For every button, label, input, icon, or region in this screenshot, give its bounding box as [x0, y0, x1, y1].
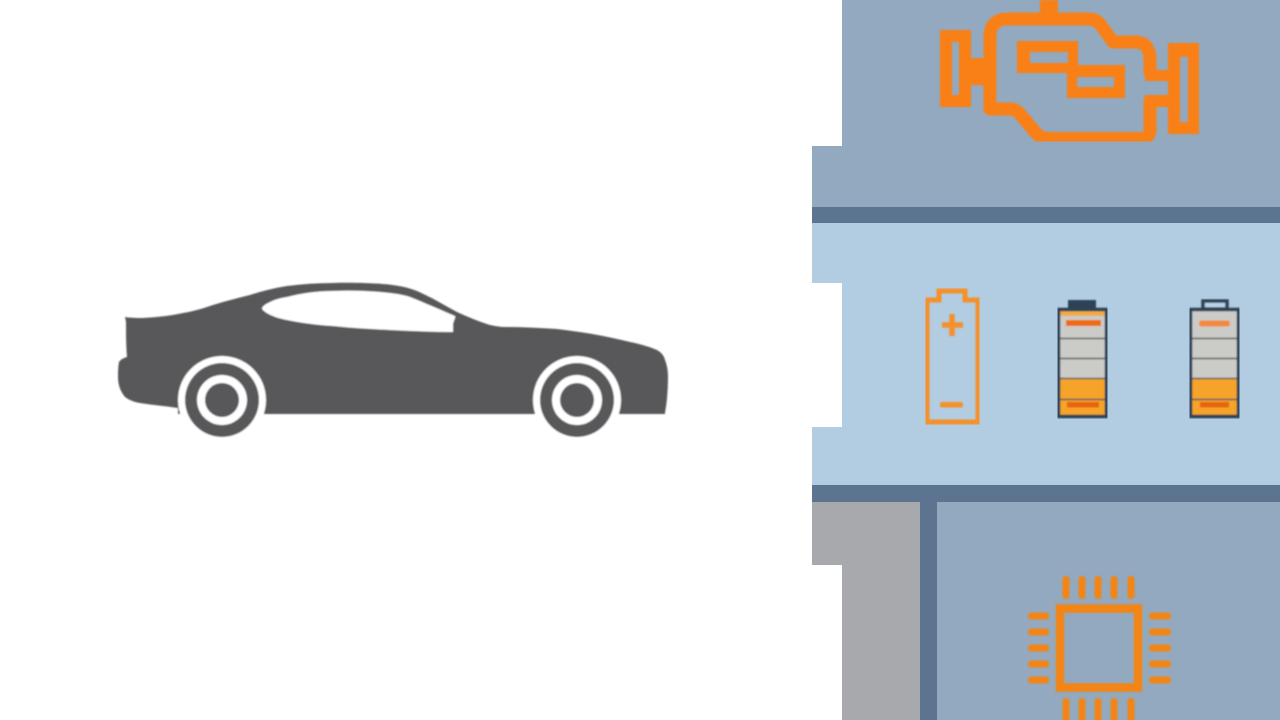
- rear wheel: [178, 356, 266, 444]
- cell bottom dash: [1200, 402, 1229, 408]
- cell casing: [1058, 310, 1106, 416]
- chip outline: [1060, 608, 1138, 688]
- engine stem: [1040, 0, 1058, 16]
- panel: grey block: [812, 502, 920, 720]
- engine lower cylinder: [1067, 65, 1125, 98]
- cell cap outline: [1203, 301, 1227, 309]
- cell top dash: [1199, 320, 1230, 326]
- chip bottom pins: [1062, 698, 1134, 720]
- cell orange segments: [1060, 378, 1105, 416]
- cell casing: [1190, 310, 1238, 416]
- icon: charged battery one: [1058, 300, 1106, 416]
- icon: engine: [940, 0, 1199, 138]
- front wheel: [533, 356, 621, 444]
- cell cap: [1068, 300, 1096, 309]
- cell top glow: [1060, 311, 1105, 316]
- chip right pins: [1149, 612, 1171, 684]
- cell grey segments: [1192, 311, 1237, 378]
- panel: battery: [812, 223, 1280, 485]
- cell bottom dash: [1067, 402, 1099, 408]
- chip top pins: [1062, 576, 1134, 599]
- panel: chip: [937, 502, 1280, 720]
- engine upper cylinder: [1017, 41, 1078, 73]
- car window: [262, 291, 455, 332]
- panel: engine: [812, 0, 1280, 207]
- divider bars: [812, 207, 1280, 720]
- cell orange segments: [1192, 378, 1237, 416]
- engine right flywheel: [1145, 43, 1199, 134]
- engine body outline: [990, 19, 1150, 138]
- cell separators: [1192, 338, 1237, 400]
- cell top dash: [1066, 320, 1101, 326]
- cell grey segments: [1060, 311, 1105, 378]
- engine left flywheel: [940, 30, 990, 107]
- icon: charged battery two: [1190, 301, 1238, 416]
- car silhouette: [118, 283, 668, 444]
- battery minus sign: [940, 402, 963, 408]
- battery plus sign: [942, 314, 963, 336]
- chip left pins: [1028, 612, 1049, 684]
- cell separators: [1060, 338, 1105, 400]
- icon: microchip: [1028, 576, 1171, 720]
- car body: [118, 283, 668, 414]
- icon: battery outline: [927, 291, 978, 422]
- battery casing: [927, 291, 978, 422]
